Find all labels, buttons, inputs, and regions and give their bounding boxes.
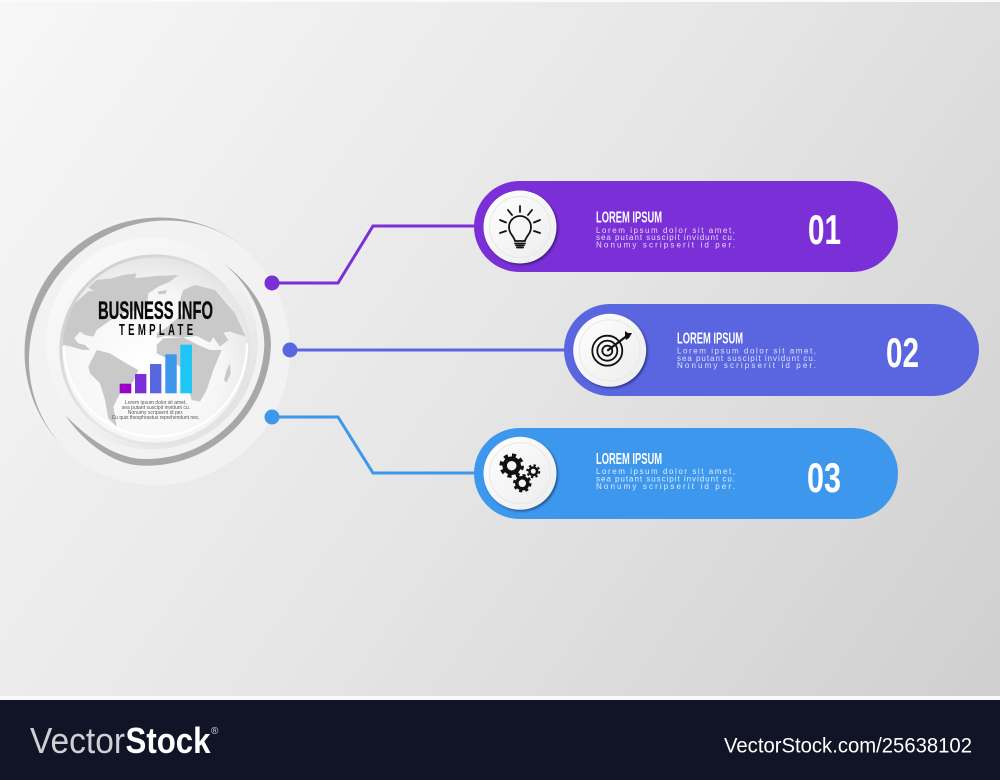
- item 02 body: Nonumy scripserit id per.: [677, 361, 816, 370]
- item 03 number: 03: [807, 454, 841, 501]
- item 01 body: [596, 226, 735, 250]
- icon: light bulb: [484, 190, 558, 265]
- connector: purple: [264, 226, 480, 290]
- globe: [59, 254, 251, 446]
- item 03 body: Lorem ipsum dolor sit amet,: [596, 467, 735, 476]
- globe caption: Lorem ipsum dolor sit amet,: [125, 400, 187, 406]
- footer bar: [0, 700, 1000, 780]
- outer grey ring arcs: [25, 218, 271, 466]
- title: business info: BUSINESS INFO: [98, 297, 213, 325]
- globe caption: Cu quis theophrastus reprehendunt nec.: [112, 415, 200, 421]
- globe caption: sea putant suscipit invidunt cu.: [122, 405, 190, 411]
- panel: item 01: [474, 181, 898, 272]
- globe caption: [112, 400, 200, 421]
- subtitle: template: TEMPLATE: [119, 320, 196, 339]
- item 03 body: Nonumy scripserit id per.: [596, 482, 735, 491]
- footer logo: ®: [211, 726, 219, 737]
- item 02 heading: LOREM IPSUM: [677, 330, 743, 347]
- panel: item 03: [474, 428, 898, 519]
- item 01 heading: LOREM IPSUM: [596, 210, 662, 227]
- item 02 body: sea putant suscipit invidunt cu.: [677, 354, 816, 363]
- footer id: VectorStock.com/25638102: [724, 734, 972, 758]
- footer logo: Stock: [126, 720, 211, 761]
- item 02 body: [677, 346, 816, 370]
- item 02 number: 02: [886, 329, 919, 376]
- panel: globe badge: [24, 218, 271, 466]
- item 02 body: Lorem ipsum dolor sit amet,: [677, 346, 816, 356]
- item 01 body: sea putant suscipit invidunt cu.: [596, 233, 735, 242]
- connector: blue: [264, 410, 480, 473]
- item 01 number: 01: [808, 206, 841, 253]
- footer logo: Vector: [30, 720, 125, 761]
- item 03 heading: LOREM IPSUM: [596, 451, 662, 468]
- footer logo: [30, 720, 219, 761]
- item 03 body: [596, 467, 735, 491]
- icon: target: [573, 314, 648, 388]
- panel: item 02: [564, 304, 979, 396]
- globe caption: Nonumy scripsent id per.: [128, 410, 183, 416]
- icon: gears: [484, 437, 558, 511]
- item 03 body: sea putant suscipit invidunt cu.: [596, 474, 735, 484]
- bar chart: [120, 345, 192, 393]
- item 01 body: Lorem ipsum dolor sit amet,: [596, 226, 735, 235]
- item 01 body: Nonumy scripserit id per.: [596, 240, 735, 250]
- white disc: [46, 237, 258, 449]
- connector: indigo: [282, 342, 570, 358]
